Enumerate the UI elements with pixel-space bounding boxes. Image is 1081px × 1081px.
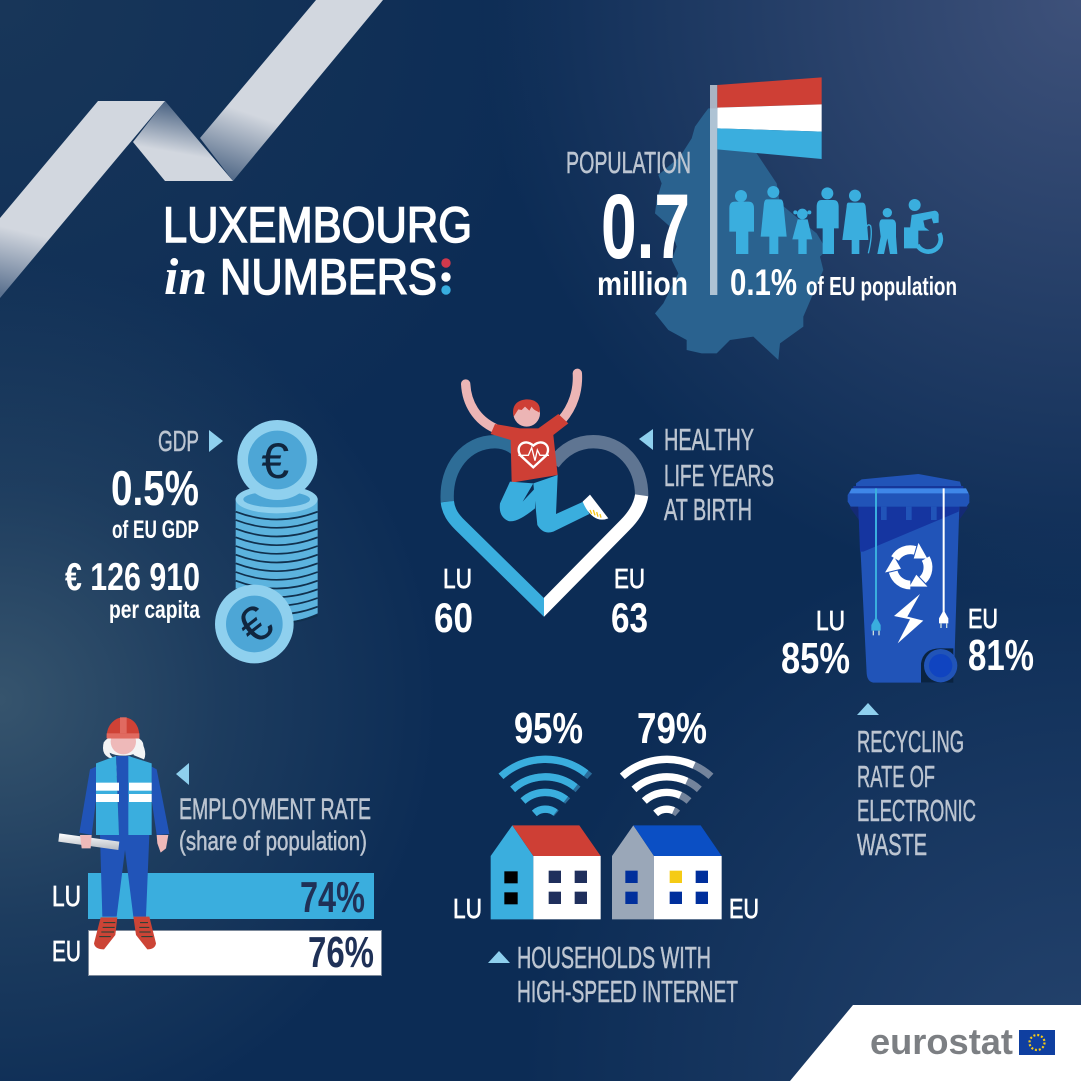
employment bar chart: [52, 873, 382, 977]
recycling values: 81%: [968, 631, 1034, 680]
healthy life years values: EU: [614, 563, 645, 594]
employment bar chart: 76%: [308, 928, 374, 977]
arrow: internet: [488, 951, 510, 963]
healthy life years values: 60: [434, 594, 473, 641]
icon: recycling bin: [848, 474, 969, 683]
recycling values: 85%: [781, 634, 850, 683]
house labels: LU: [453, 893, 482, 924]
icon: house LU: [491, 825, 601, 919]
population text: POPULATION: [566, 145, 691, 180]
recycling values: LU: [816, 605, 845, 636]
healthy life years values: [434, 563, 648, 641]
healthy life years values: LU: [443, 563, 472, 594]
employment bar chart: 74%: [300, 873, 365, 922]
icon: wifi LU: [501, 759, 590, 813]
GDP text: [65, 426, 201, 624]
recycling text: WASTE: [857, 827, 927, 862]
eurostat logo panel: eurostat: [870, 1021, 1013, 1062]
icon: wifi EU: [622, 759, 711, 813]
internet values: [514, 704, 707, 753]
recycling text: RATE OF: [857, 759, 935, 794]
healthy life years text: [664, 422, 774, 527]
population text: 0.1%: [730, 262, 797, 303]
employment text: (share of population): [179, 826, 367, 856]
house labels: EU: [729, 893, 759, 924]
internet text: [517, 940, 738, 1009]
icon: coin stack: [215, 420, 318, 663]
GDP text: GDP: [158, 426, 199, 458]
icon: coin stack: €: [261, 433, 289, 489]
healthy life years values: 63: [611, 594, 648, 641]
employment bar chart: EU: [52, 936, 81, 968]
recycling values: EU: [968, 603, 998, 634]
internet text: HIGH-SPEED INTERNET: [517, 974, 738, 1009]
GDP text: per capita: [109, 596, 201, 624]
internet values: 79%: [637, 704, 707, 753]
population text: [566, 145, 957, 303]
internet text: HOUSEHOLDS WITH: [517, 940, 711, 975]
population text: of EU population: [806, 271, 957, 301]
title: LUXEMBOURG: [163, 197, 472, 253]
title: NUMBERS: [220, 249, 437, 305]
healthy life years text: LIFE YEARS: [664, 458, 774, 493]
GDP text: € 126 910: [65, 556, 200, 599]
title: [163, 197, 472, 306]
arrow: employment: [176, 763, 189, 785]
population text: million: [597, 265, 688, 302]
icon: house EU: [612, 825, 722, 919]
recycling text: [857, 724, 976, 862]
flag of Luxembourg on pole: [710, 77, 822, 295]
icon: group of people: [729, 186, 941, 254]
population text: 0.7: [601, 176, 690, 278]
GDP text: 0.5%: [111, 462, 199, 516]
icon: coin stack: €: [227, 594, 283, 655]
recycling values: [781, 603, 1034, 683]
employment text: EMPLOYMENT RATE: [179, 793, 371, 826]
folded ribbon: [0, 0, 383, 298]
arrow: GDP: [209, 430, 223, 452]
map of Luxembourg: [655, 108, 827, 360]
icon: construction worker: [58, 717, 169, 949]
employment bar chart: LU: [52, 881, 81, 913]
arrow: recycling: [857, 703, 879, 715]
recycling text: RECYCLING: [857, 724, 964, 759]
GDP text: of EU GDP: [112, 516, 199, 544]
icon: jumping person and heart: [447, 373, 642, 617]
employment text: [179, 793, 371, 856]
house labels: [453, 893, 759, 924]
healthy life years text: AT BIRTH: [664, 492, 752, 527]
title: in: [164, 249, 207, 306]
eurostat logo panel: [790, 1005, 1081, 1081]
healthy life years text: HEALTHY: [664, 422, 754, 457]
arrow: healthy life years: [639, 429, 653, 450]
internet values: 95%: [514, 704, 583, 753]
recycling text: ELECTRONIC: [857, 793, 976, 828]
